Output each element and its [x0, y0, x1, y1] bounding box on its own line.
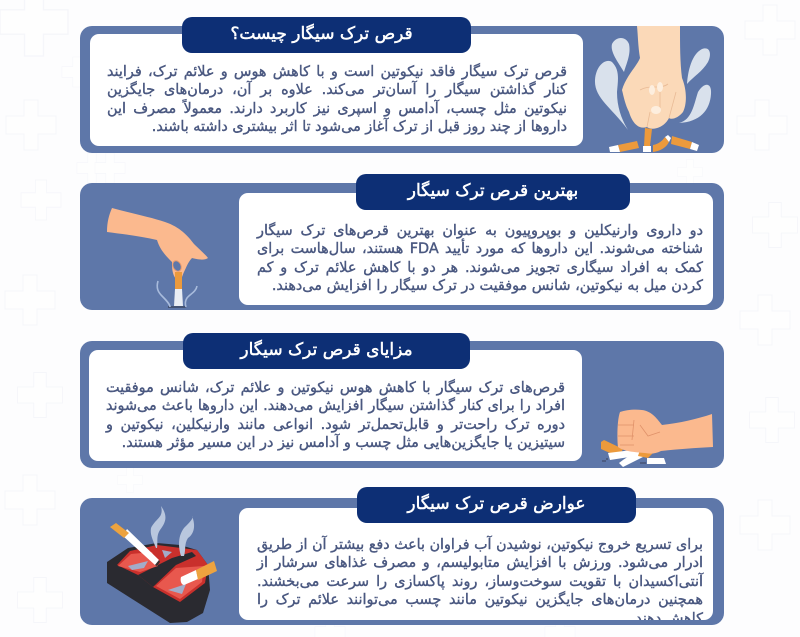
body text: ادرار می‌شود. ورزش با افزایش متابولیسم، و مصرف غذاهای سرشار از: [257, 555, 703, 571]
icon: hand stubbing out a cigarette: [107, 208, 208, 308]
heading: قرص ترک سیگار چیست؟: [230, 24, 413, 44]
body text: داروها از چند روز قبل از ترک آغاز می‌شود تا اثر بیشتری داشته باشند.: [152, 119, 567, 135]
heading: [183, 333, 470, 369]
heading: مزایای قرص ترک سیگار: [240, 340, 413, 360]
text card: [89, 350, 582, 461]
body text: دوره ترک راحت‌تر و قابل‌تحمل‌تر شود. انواعی مانند وارنیکلین، نیکوتین و: [106, 417, 565, 433]
panel: side effects of quit-smoking pill: [80, 487, 724, 625]
text card: [239, 193, 713, 305]
body text: [256, 222, 704, 294]
icon: fist crushing cigarette: [601, 410, 713, 467]
body text: قرص ترک سیگار فاقد نیکوتین است و با کاهش هوس و علائم ترک، فرایند: [107, 64, 567, 80]
body text: نیکوتین مثل چسب، آدامس و اسپری نیز کاربرد دارند. معمولاً مصرف این: [107, 101, 567, 117]
body text: افراد را برای کنار گذاشتن سیگار افزایش می‌دهند. این داروها باعث می‌شوند: [106, 398, 565, 414]
body text: آنتی‌اکسیدان با تقویت سوخت‌وساز، روند پاکسازی را سرعت می‌بخشند.: [257, 574, 703, 590]
body text: کنار گذاشتن سیگار را آسان‌تر می‌کند. علاوه بر آن، درمان‌های جایگزین: [107, 82, 567, 98]
panel: benefits of quit-smoking pill: [80, 333, 724, 468]
icon: fist crushing cigarettes: [594, 26, 712, 152]
body text: همچنین درمان‌های جایگزین نیکوتین مانند چسب می‌توانند علائم ترک را: [257, 592, 703, 608]
body text: [256, 535, 704, 620]
body text: قرص‌های ترک سیگار با کاهش هوس نیکوتین و علائم ترک، شانس موفقیت: [106, 380, 565, 396]
panel: best quit-smoking pill: [80, 174, 724, 310]
body text: [105, 378, 565, 451]
heading: [357, 487, 636, 523]
text card: [90, 34, 583, 146]
heading: [356, 174, 630, 210]
body text: شناخته می‌شوند. این داروها که مورد تأیید FDA هستند، سال‌هاست برای: [257, 241, 703, 257]
heading: عوارض قرص ترک سیگار: [407, 494, 586, 514]
body text: دو داروی وارنیکلین و بوپروپیون به عنوان بهترین قرص‌های ترک سیگار: [257, 223, 703, 239]
body text: کردن میل به نیکوتین، شانس موفقیت در ترک سیگار را افزایش می‌دهند.: [272, 278, 703, 294]
heading: بهترین قرص ترک سیگار: [408, 181, 578, 201]
icon: ashtray with cigarettes: [107, 506, 217, 623]
body text: [107, 62, 568, 135]
body text: کمک به افراد سیگاری تجویز می‌شوند. هر دو با کاهش علائم ترک و کم: [257, 260, 703, 276]
body text: برای تسریع خروج نیکوتین، نوشیدن آب فراوان باعث دفع بیشتر آن از طریق: [257, 537, 703, 553]
text card: [239, 508, 713, 620]
heading: [182, 17, 471, 53]
body text: سیتیزین یا جایگزین‌هایی مثل چسب و آدامس نیز در این مسیر مؤثر هستند.: [122, 435, 565, 451]
panel: what is the quit-smoking pill: [80, 17, 724, 153]
